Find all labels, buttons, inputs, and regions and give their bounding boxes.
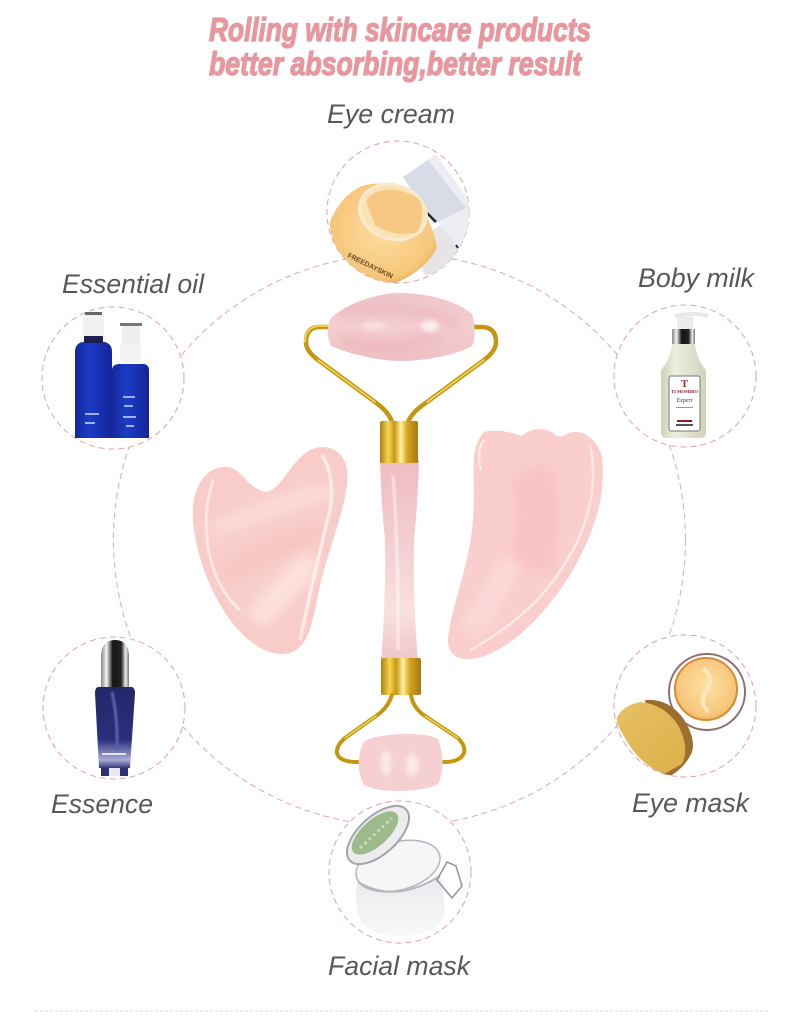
gua sha: comb shape — [448, 429, 603, 659]
handle — [380, 460, 419, 662]
small roller head — [359, 734, 442, 791]
icon: dropper bottle — [95, 640, 135, 776]
label: essential oil: Essential oil — [62, 269, 205, 299]
roller frame top — [305, 326, 496, 422]
icon: pump bottle: T — [681, 378, 689, 390]
gua sha: heart shape — [193, 447, 348, 654]
eye mask circle — [614, 635, 756, 777]
title: Rolling with skincare products — [209, 11, 591, 48]
icon: pump bottle: Expert — [676, 398, 693, 404]
title — [209, 11, 591, 82]
icon: clear jar body — [350, 832, 462, 936]
icon: cream jar: FREEDAYSKIN — [346, 253, 394, 281]
icon: pump bottle — [661, 314, 708, 438]
roller frame bottom — [337, 695, 464, 762]
face roller — [305, 293, 496, 791]
icon: short blue bottle — [112, 323, 149, 438]
icon: gold lid — [617, 700, 693, 775]
icon: cream jar — [330, 176, 436, 284]
label: essence: Essence — [51, 789, 153, 819]
icon: tall blue bottle — [75, 312, 112, 438]
essential oil circle — [42, 307, 184, 449]
facial mask circle — [329, 795, 471, 943]
label: facial mask: Facial mask — [328, 951, 471, 981]
large roller head — [328, 293, 475, 361]
icon: green lid — [337, 795, 419, 875]
large dashed ring — [114, 254, 686, 826]
icon: pump bottle: TI MOMIRO — [671, 389, 698, 394]
label: eye cream: Eye cream — [327, 99, 455, 129]
label: eye mask: Eye mask — [632, 788, 750, 818]
boby milk circle — [614, 305, 756, 447]
collar top — [380, 421, 418, 463]
title: better absorbing,better result — [209, 45, 583, 82]
eye cream circle — [327, 141, 472, 284]
icon: white tube — [403, 154, 472, 275]
collar bottom — [381, 658, 421, 695]
label: boby milk: Boby milk — [638, 263, 755, 293]
essence circle — [43, 637, 185, 779]
icon: open jar — [669, 654, 745, 730]
